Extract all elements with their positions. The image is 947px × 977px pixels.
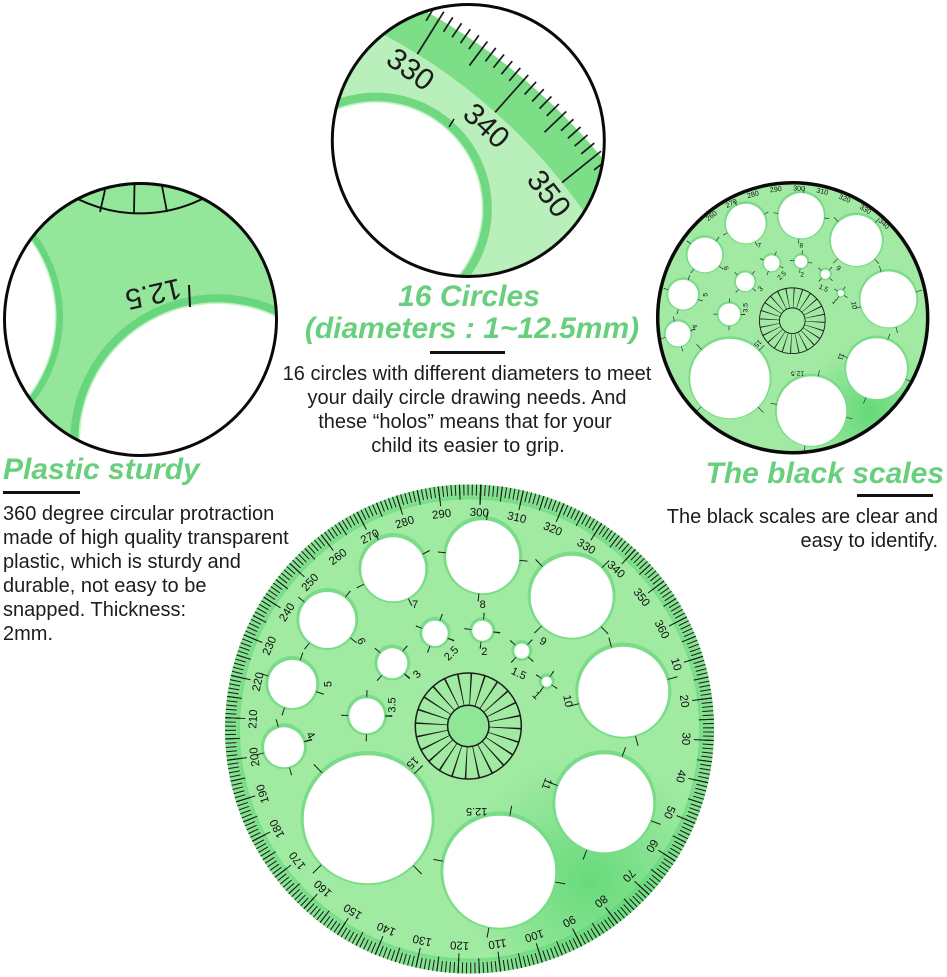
- inset: black scales close-up: 3.5: [742, 303, 749, 312]
- degree labels: 200: [248, 747, 262, 767]
- text block: plastic sturdy description: plastic, which is sturdy and: [3, 551, 241, 573]
- text block: 16 circles description: child its easier to grip.: [371, 435, 565, 457]
- degree labels: 10: [668, 657, 683, 672]
- scale number 330: 330: [380, 42, 440, 98]
- degree labels: 360: [652, 618, 671, 641]
- inset: black scales close-up: 340: [877, 217, 891, 231]
- text block: black scales description: easy to identify.: [801, 530, 938, 552]
- text block: plastic sturdy description: 360 degree circular protraction: [3, 503, 274, 525]
- inset: black scales close-up: 300: [793, 184, 805, 193]
- main circular protractor: [220, 479, 719, 977]
- scale number 350: 350: [520, 164, 577, 224]
- degree labels: 260: [327, 547, 350, 568]
- inset: black scales close-up: 7: [757, 243, 761, 250]
- scale number 340: 340: [457, 97, 516, 155]
- hole rings and holes: [253, 512, 686, 944]
- hole size labels: 11: [539, 776, 554, 791]
- text block: black scales description: [667, 494, 938, 552]
- inset: black scales close-up: 280: [746, 189, 760, 200]
- text block: 16 circles description: your daily circle drawing needs. And: [307, 387, 627, 409]
- inset: black scales close-up: 330: [858, 203, 872, 216]
- degree labels: [238, 497, 701, 961]
- heading: diameters: (diameters : 1~12.5mm): [305, 312, 639, 345]
- degree labels: 130: [412, 932, 433, 948]
- scale number 12.5: 12.5: [122, 271, 184, 315]
- degree labels: 20: [677, 694, 690, 708]
- inset: black scales close-up: 15: [752, 338, 762, 348]
- degree labels: 280: [394, 514, 416, 531]
- inset: black scales close-up: 9: [835, 265, 842, 273]
- inset: black scales close-up: 320: [838, 193, 852, 205]
- inset: black scales close-up: 10: [849, 301, 857, 310]
- degree labels: 220: [251, 671, 267, 693]
- inset: black scales close-up: 4: [690, 323, 698, 330]
- inset: black scales close-up: 2: [800, 272, 804, 279]
- text block: plastic sturdy description: snapped. Thickness:: [3, 599, 186, 621]
- degree labels: 180: [268, 817, 287, 840]
- degree labels: 320: [541, 520, 564, 539]
- hole size labels: 7: [412, 599, 418, 611]
- degree labels: 70: [620, 866, 637, 884]
- inset: black scales close-up: 1: [830, 298, 838, 306]
- heading: The black scales: The black scales: [706, 457, 944, 490]
- inset: black scales close-up: 3: [757, 285, 765, 293]
- hole size labels: 1: [530, 689, 542, 702]
- inset: degree scale close-up: [330, 3, 606, 278]
- degree labels: 240: [277, 601, 298, 624]
- inset: black scales close-up: 12.5: [791, 370, 804, 377]
- text block: 16 circles description: these “holos” means that for your: [318, 411, 612, 433]
- degree labels: 150: [342, 901, 364, 921]
- hole size labels: 3: [411, 668, 424, 681]
- degree labels: 120: [450, 938, 470, 951]
- hole size labels: 2: [481, 646, 487, 658]
- hole size labels: 10: [560, 694, 574, 708]
- heading: 16 Circles: 16 Circles: [398, 280, 540, 313]
- degree labels: 90: [560, 912, 577, 929]
- text block: plastic sturdy description: durable, not easy to be: [3, 575, 206, 597]
- heading: Plastic sturdy: Plastic sturdy: [3, 453, 201, 486]
- hole size labels: 12.5: [466, 805, 487, 817]
- inset: black scales close-up: 8: [799, 243, 803, 250]
- text block: 16 circles description: 16 circles with different diameters to meet: [283, 363, 652, 385]
- inset: black scales close-up: [650, 180, 947, 460]
- degree labels: 190: [255, 783, 272, 805]
- inset: plastic thickness close-up: [3, 182, 278, 457]
- hole size labels: 8: [480, 599, 486, 611]
- degree labels: 340: [605, 559, 627, 581]
- hole size labels: 5: [323, 681, 335, 687]
- degree labels: 290: [431, 508, 452, 522]
- text block: 16 circles description: [283, 351, 652, 457]
- degree labels: 270: [359, 527, 381, 547]
- hole size labels: [303, 599, 574, 817]
- degree labels: 80: [592, 892, 609, 909]
- central radial wheel: [415, 673, 521, 779]
- text block: plastic sturdy description: made of high quality transparent: [3, 527, 289, 549]
- hole size labels: 2.5: [442, 644, 461, 663]
- degree labels: 60: [643, 837, 660, 854]
- inset: black scales close-up: 290: [769, 185, 782, 194]
- degree ticks: [220, 479, 719, 977]
- degree labels: 350: [631, 587, 652, 609]
- degree labels: 30: [679, 732, 692, 745]
- hole size labels: 4: [303, 730, 317, 741]
- inset: black scales close-up: 2.5: [776, 270, 788, 282]
- inset: black scales close-up: 11: [836, 352, 845, 361]
- degree labels: 300: [469, 507, 489, 520]
- text block: black scales description: The black scales are clear and: [667, 506, 938, 528]
- inset: black scales close-up: 270: [724, 197, 738, 210]
- degree labels: 110: [487, 936, 507, 950]
- degree labels: 310: [506, 510, 527, 526]
- degree labels: 160: [312, 877, 334, 899]
- inset: black scales close-up: 310: [816, 187, 829, 197]
- hole size labels: 1.5: [509, 665, 528, 683]
- inset: black scales close-up: 6: [721, 265, 729, 272]
- hole size labels: 3.5: [387, 697, 399, 713]
- hole size labels: 6: [354, 636, 368, 647]
- hole size labels: 15: [404, 754, 421, 771]
- hole size labels: 9: [537, 635, 548, 649]
- degree labels: 40: [673, 769, 688, 784]
- degree labels: 250: [300, 572, 321, 594]
- degree labels: 100: [523, 927, 545, 944]
- degree labels: 230: [261, 635, 279, 657]
- inset: black scales close-up: 260: [704, 209, 719, 223]
- inset: black scales close-up: 5: [703, 293, 710, 297]
- degree labels: 330: [575, 537, 597, 557]
- degree labels: 50: [661, 804, 677, 820]
- text block: plastic sturdy description: 2mm.: [3, 623, 53, 645]
- degree labels: 210: [247, 709, 260, 729]
- degree labels: 170: [287, 849, 308, 871]
- degree labels: 140: [375, 919, 398, 938]
- inset: black scales close-up: 1.5: [818, 284, 829, 294]
- text block: plastic sturdy description: [3, 491, 289, 645]
